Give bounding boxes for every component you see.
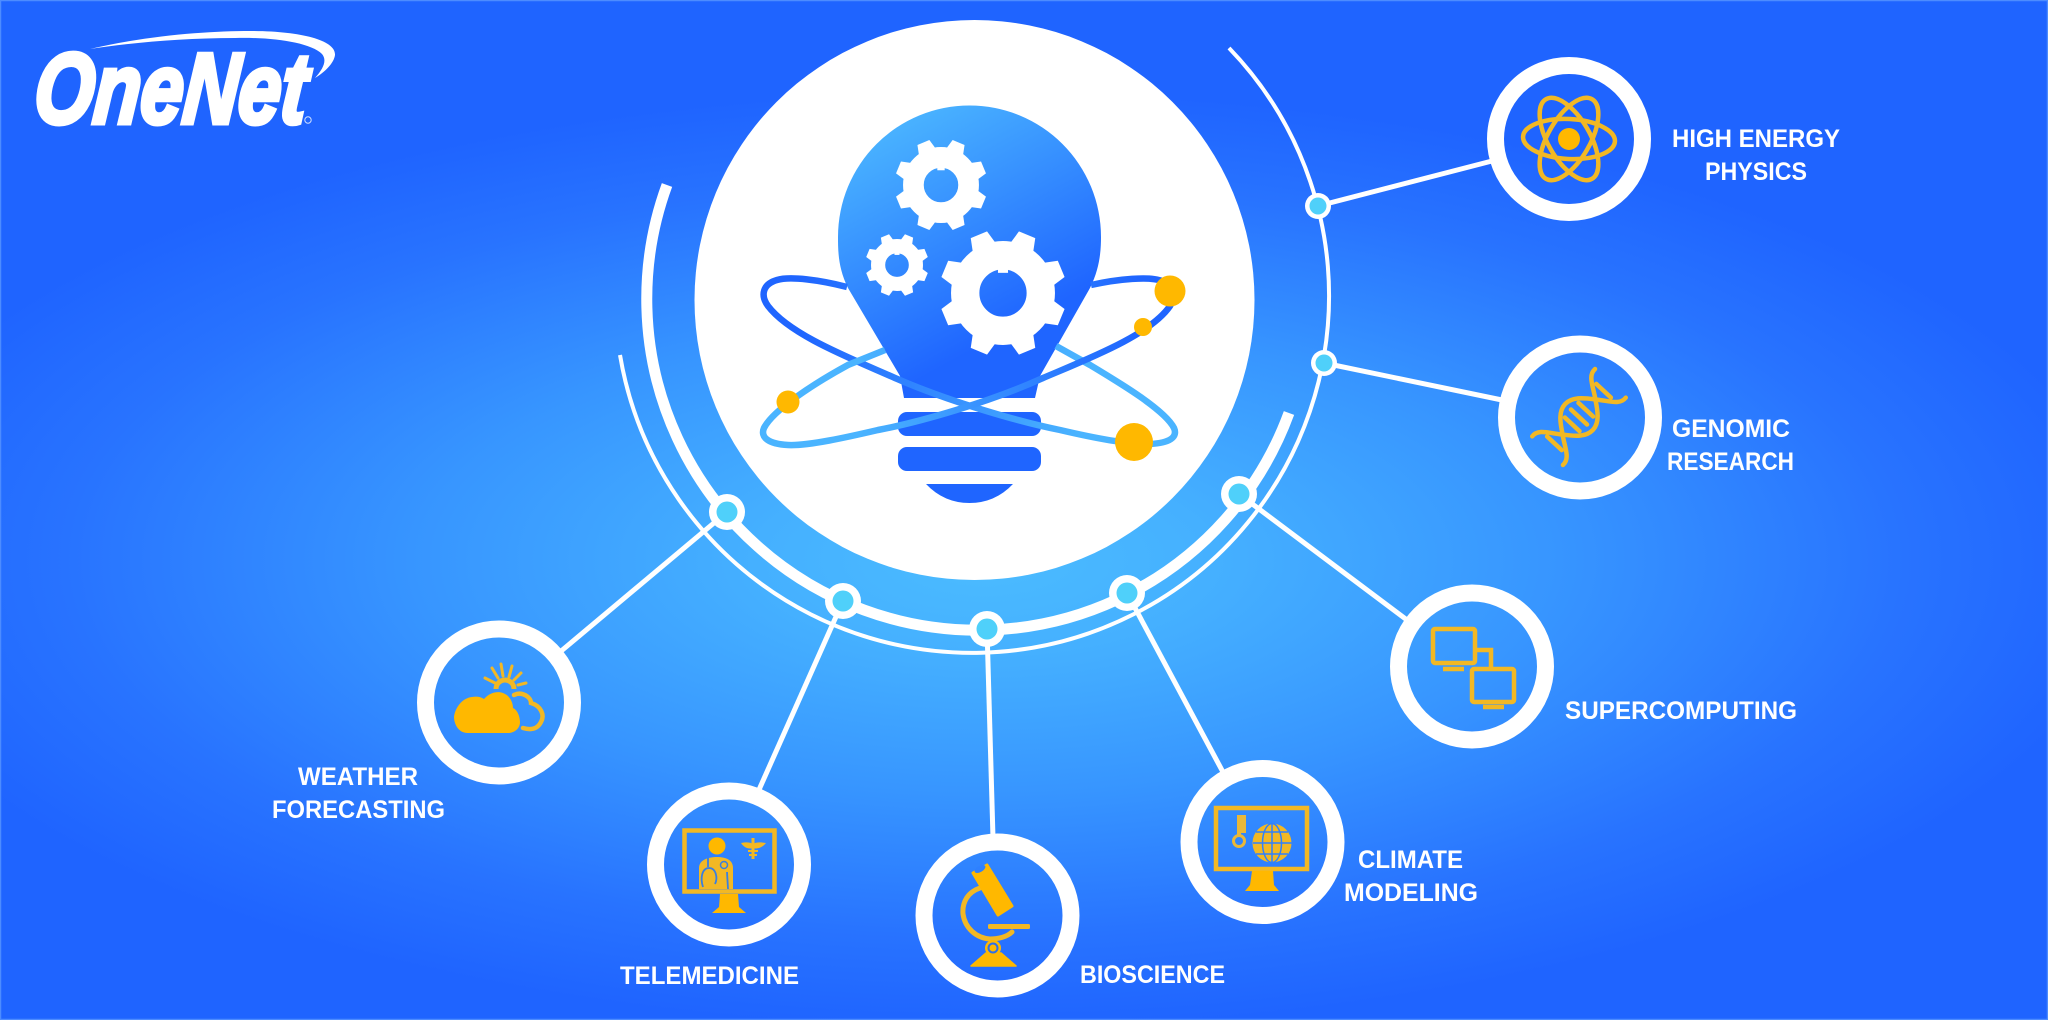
label: supercomputing: SUPERCOMPUTING bbox=[1565, 697, 1797, 725]
node: telemedicine bbox=[656, 791, 802, 938]
label: weather forecasting bbox=[272, 763, 445, 824]
icon: sun and clouds bbox=[454, 664, 543, 733]
label: weather forecasting: WEATHER bbox=[298, 763, 418, 791]
central white circle bbox=[694, 20, 1254, 580]
connector lines bbox=[560, 161, 1502, 838]
OneNet logo: OneNet bbox=[30, 33, 315, 145]
large gear bbox=[940, 230, 1066, 356]
medium gear bbox=[895, 139, 987, 231]
inner thick arc bbox=[647, 185, 1289, 630]
label: genomic research: RESEARCH bbox=[1667, 448, 1794, 476]
bulb base bbox=[898, 412, 1041, 503]
small gear bbox=[865, 233, 929, 297]
label: weather forecasting: FORECASTING bbox=[272, 796, 445, 824]
node: supercomputing bbox=[1398, 593, 1546, 740]
label: telemedicine: TELEMEDICINE bbox=[620, 962, 799, 990]
label: climate modeling: MODELING bbox=[1344, 879, 1478, 907]
icon: telemedicine monitor bbox=[684, 830, 774, 913]
label: genomic research bbox=[1667, 415, 1794, 476]
node: weather forecasting bbox=[426, 629, 572, 776]
label: climate modeling: CLIMATE bbox=[1358, 846, 1463, 874]
icon: microscope bbox=[963, 863, 1030, 966]
icon: DNA helix bbox=[1532, 369, 1626, 465]
icon: monitor with thermometer and globe bbox=[1216, 808, 1307, 891]
node: climate modeling bbox=[1189, 768, 1336, 916]
label: high energy physics: HIGH ENERGY bbox=[1672, 125, 1840, 153]
icon: linked computers bbox=[1433, 629, 1514, 707]
label: bioscience: BIOSCIENCE bbox=[1080, 961, 1225, 989]
orbits bbox=[763, 278, 1175, 445]
node: genomic research bbox=[1506, 344, 1654, 491]
label: climate modeling bbox=[1344, 846, 1478, 907]
node: bioscience bbox=[924, 842, 1071, 989]
node: high energy physics bbox=[1496, 66, 1642, 212]
label: genomic research: GENOMIC bbox=[1672, 415, 1790, 443]
icon: atom bbox=[1522, 89, 1616, 189]
outer thin arc bbox=[620, 48, 1329, 653]
label: high energy physics: PHYSICS bbox=[1705, 158, 1807, 186]
label: high energy physics bbox=[1672, 125, 1840, 186]
gold electrons bbox=[776, 276, 1186, 461]
arc nodes bbox=[709, 193, 1337, 647]
central lightbulb with gears and orbits bbox=[763, 106, 1186, 503]
bulb head bbox=[838, 106, 1101, 398]
